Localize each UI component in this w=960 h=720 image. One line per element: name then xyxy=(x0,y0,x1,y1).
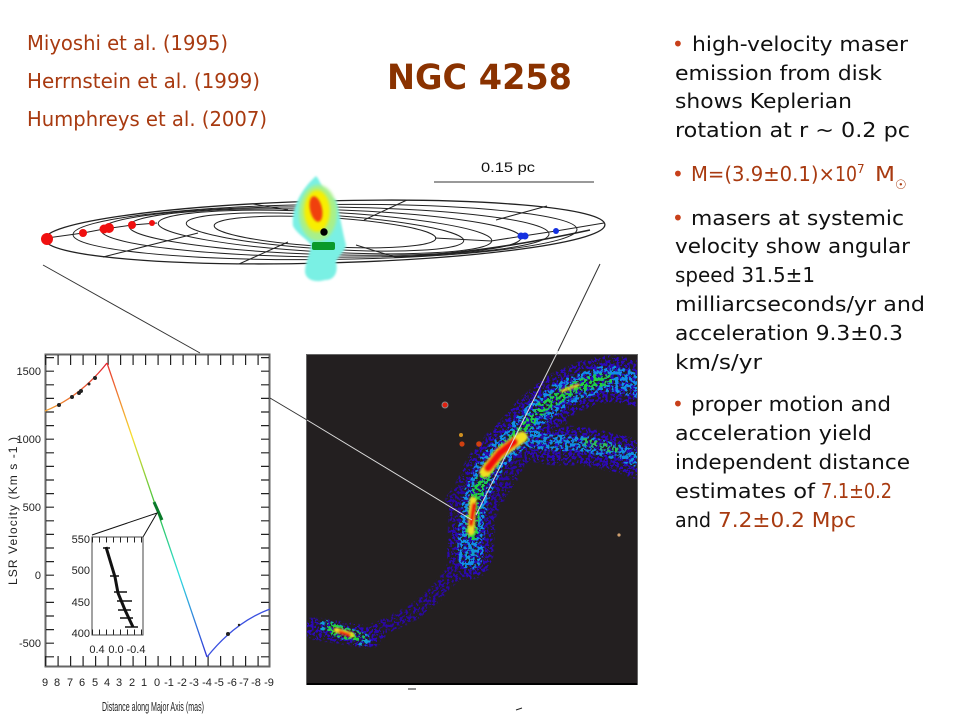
bullet: distance estimates: 7.1±0.2 xyxy=(821,479,892,503)
bullet: distance estimates: and xyxy=(675,508,711,532)
inset plot: 500 xyxy=(72,565,90,577)
plot frame and ticks xyxy=(45,354,270,667)
inset plot xyxy=(72,513,157,656)
emission layers clipped to panel xyxy=(310,378,645,640)
bullet: black hole mass: 10 xyxy=(835,162,857,186)
bullet: Keplerian rotation xyxy=(672,32,910,142)
bullet: systemic masers xyxy=(672,206,925,374)
rotation curve plot xyxy=(6,354,274,714)
x axis numbers: -8 xyxy=(251,677,261,689)
axis tick labels: 1000 xyxy=(17,434,41,446)
bullet: systemic masers: milliarcseconds/yr and xyxy=(675,292,925,316)
emission: green core xyxy=(328,379,617,638)
emission: cyan-blue xyxy=(325,378,640,640)
axis tick labels: 0 xyxy=(35,570,41,582)
bullet: systemic masers: velocity show angular xyxy=(675,234,911,258)
x axis numbers: 2 xyxy=(129,677,135,689)
data points xyxy=(57,376,240,636)
axis tick labels xyxy=(17,366,41,650)
scale bar: 0.15 pc: 0.15 pc xyxy=(481,159,535,175)
x axis numbers: -2 xyxy=(177,677,187,689)
connector lines xyxy=(43,264,600,520)
bullet: systemic masers: • xyxy=(672,206,684,230)
inset plot: 0.0 xyxy=(108,644,124,656)
bullet: black hole mass: • xyxy=(672,162,684,186)
systemic masers: green xyxy=(312,242,335,250)
references list: Herrnstein et al. (1999) xyxy=(27,69,260,93)
inset plot: 400 xyxy=(72,628,90,640)
bullet: Keplerian rotation: emission from disk xyxy=(675,61,882,85)
velocity curve xyxy=(45,363,270,657)
x axis numbers: 3 xyxy=(116,677,122,689)
y axis label: LSR Velocity (Km s -1 ) xyxy=(6,437,20,585)
tiny marks below panel xyxy=(408,689,522,710)
bullet: Keplerian rotation: shows Keplerian xyxy=(675,89,852,113)
bullet: distance estimates: 7.2±0.2 Mpc xyxy=(718,508,856,532)
bullet: systemic masers: km/s/yr xyxy=(675,350,763,374)
x axis numbers: 0 xyxy=(154,677,160,689)
references list: Miyoshi et al. (1995) xyxy=(27,31,228,55)
inset plot: 450 xyxy=(72,597,90,609)
x axis numbers: -7 xyxy=(239,677,249,689)
bullet: distance estimates: acceleration yield xyxy=(675,421,872,445)
x axis numbers xyxy=(42,677,274,689)
bullet: black hole mass: M=(3.9±0.1)× xyxy=(691,162,835,186)
bullet: systemic masers: speed 31.5±1 xyxy=(675,263,815,287)
x axis numbers: 5 xyxy=(92,677,98,689)
title: NGC 4258 xyxy=(387,58,572,98)
warped disk rings xyxy=(44,194,606,270)
bullet: Keplerian rotation: rotation at r ~ 0.2 pc xyxy=(675,118,910,142)
bullet: distance estimates xyxy=(672,392,910,532)
black hole dot xyxy=(320,228,328,236)
inset plot: -0.4 xyxy=(127,644,145,656)
axis tick labels: 500 xyxy=(23,502,41,514)
bullet: Keplerian rotation: • xyxy=(672,32,684,56)
bullet: Keplerian rotation: high-velocity maser xyxy=(692,32,909,56)
x axis numbers: 8 xyxy=(54,677,60,689)
x axis numbers: -4 xyxy=(202,677,212,689)
x axis label: Distance along Major Axis (mas) xyxy=(102,699,204,714)
maser heat map panel xyxy=(306,354,645,684)
x axis numbers: -5 xyxy=(214,677,224,689)
references list: Humphreys et al. (2007) xyxy=(27,107,267,131)
bullet: distance estimates: estimates of xyxy=(675,479,816,503)
axis tick labels: 1500 xyxy=(17,366,41,378)
bullet: systemic masers: masers at systemic xyxy=(691,206,904,230)
x axis numbers: 7 xyxy=(67,677,73,689)
axis tick labels: -500 xyxy=(19,638,41,650)
bullet: distance estimates: independent distance xyxy=(675,450,910,474)
bullet: black hole mass: M xyxy=(875,162,895,186)
bullet: distance estimates: proper motion and xyxy=(691,392,891,416)
x axis numbers: -9 xyxy=(264,677,274,689)
x axis numbers: -3 xyxy=(189,677,199,689)
bullet: systemic masers: acceleration 9.3±0.3 xyxy=(675,321,903,345)
emission: hot red core xyxy=(336,385,578,635)
panel background xyxy=(306,354,638,684)
references list xyxy=(27,31,267,131)
x axis numbers: 9 xyxy=(42,677,48,689)
x axis numbers: -1 xyxy=(164,677,174,689)
inset plot: 550 xyxy=(72,534,90,546)
bullet: black hole mass xyxy=(672,162,907,193)
x axis numbers: 4 xyxy=(104,677,110,689)
bullet: black hole mass: ☉ xyxy=(895,178,907,193)
x axis numbers: 1 xyxy=(141,677,147,689)
emission: diffuse violet-blue xyxy=(310,378,645,638)
x axis numbers: -6 xyxy=(227,677,237,689)
isolated maser spots xyxy=(442,402,621,537)
disk diagram xyxy=(41,176,606,281)
bullet: black hole mass: 7 xyxy=(857,162,865,176)
inset plot: 0.4 xyxy=(89,644,105,656)
x axis numbers: 6 xyxy=(79,677,85,689)
red-shifted masers xyxy=(41,220,155,245)
plume emission xyxy=(293,176,346,281)
bullet: distance estimates: • xyxy=(672,392,684,416)
blue-shifted masers xyxy=(518,228,559,240)
